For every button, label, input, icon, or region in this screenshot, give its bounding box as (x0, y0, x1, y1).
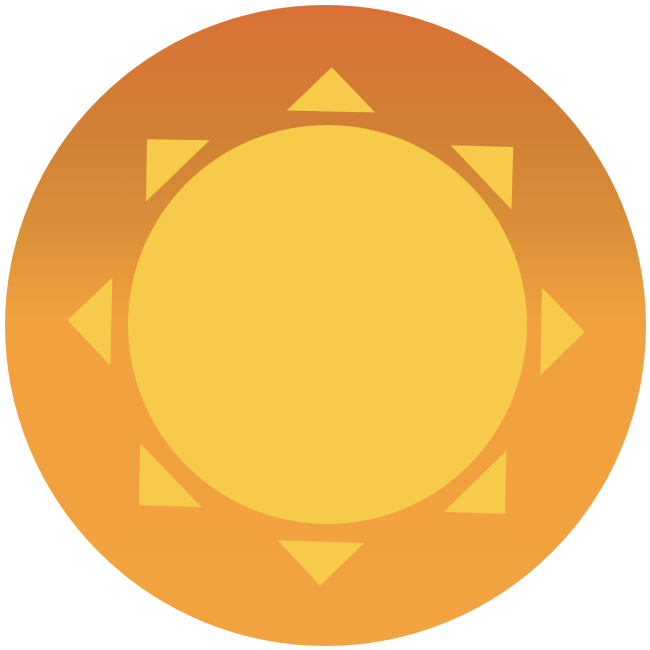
ray: bottom right (444, 450, 506, 514)
sun rays (68, 67, 584, 586)
ray: bottom (278, 540, 364, 586)
ray: top right (451, 145, 513, 210)
ray: bottom left (139, 443, 201, 507)
ray: top (287, 67, 375, 112)
sun disc (128, 125, 527, 524)
ray: left (68, 278, 112, 366)
ray: right (540, 288, 584, 376)
ray: top left (146, 139, 210, 202)
